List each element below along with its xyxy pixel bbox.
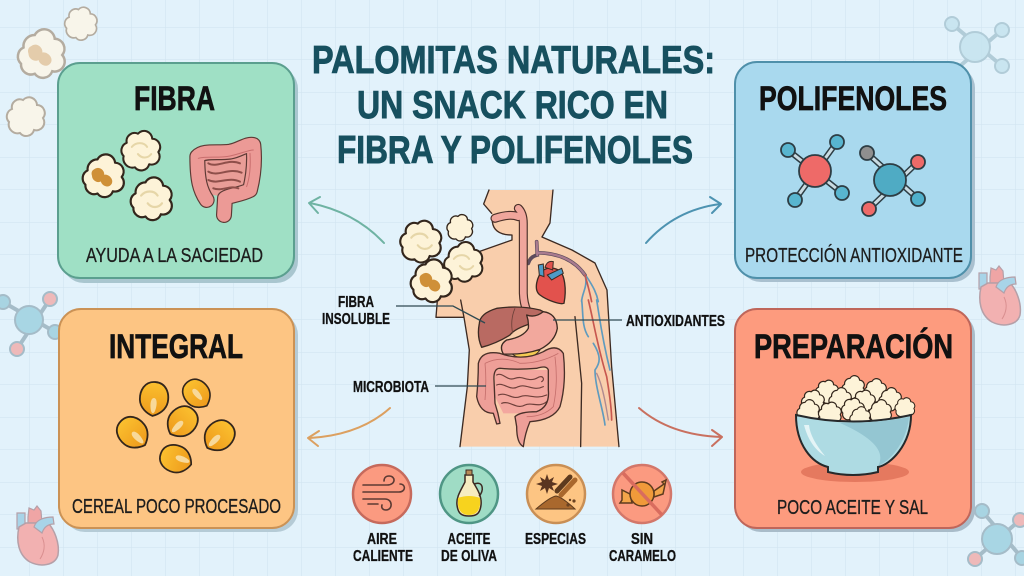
arrow: to fibra [309,197,384,243]
decoration: faint molecule left [0,292,62,356]
label: aire caliente: CALIENTE [353,548,413,565]
label: aire caliente: AIRE [367,531,397,548]
label: especias: ESPECIAS [525,531,586,548]
label: sin caramelo: SIN [631,531,653,548]
title: UN SNACK RICO EN [357,84,668,127]
panel: fibra [58,63,298,283]
heart [536,268,565,304]
decoration: faint heart left [17,506,58,565]
icon row [353,465,676,565]
arrow: to preparacion [639,408,722,446]
icon: especias [527,465,585,523]
label: aceite de oliva: DE OLIVA [441,548,497,565]
heading: fibra: FIBRA [134,80,215,118]
icon: sin caramelo [613,465,671,523]
panel: polifenoles [735,62,975,282]
popcorn near mouth [400,215,482,302]
label: sin caramelo: CARAMELO [609,548,676,565]
caption: preparacion: POCO ACEITE Y SAL [777,497,928,519]
decoration: faint molecule lower right [968,504,1024,566]
label: fibra insoluble: FIBRA [338,294,374,311]
label: fibra insoluble [322,294,485,328]
heading: polifenoles: POLIFENOLES [759,80,947,118]
icon: corn kernels [111,374,241,477]
arm vessels lower [582,300,612,425]
label: antioxidantes: ANTIOXIDANTES [626,313,725,330]
decoration: faint heart right [979,266,1020,325]
caption: fibra: AYUDA A LA SACIEDAD [86,245,263,267]
icon: molecule blue [860,146,925,216]
panel: preparacion [735,309,975,532]
decoration: faint popcorn top left [7,7,97,136]
stomach [501,312,557,354]
caption: polifenoles: PROTECCIÓN ANTIOXIDANTE [745,244,963,267]
abdominal organs [477,300,612,447]
label: aceite de oliva: ACEITE [448,531,491,548]
liver [478,307,543,347]
decoration: faint molecule top right [945,17,1009,73]
arrow: to integral [308,408,390,446]
colon [477,348,564,447]
icon: intestine [197,143,255,215]
panel: integral [59,309,298,532]
heading: integral: INTEGRAL [109,328,243,366]
icon: aceite de oliva [440,465,498,523]
icon: molecule red [781,135,849,207]
title: FIBRA Y POLIFENOLES [337,129,693,172]
esophagus [495,208,537,323]
heading: preparacion: PREPARACIÓN [754,328,953,366]
icon: aire caliente [353,465,411,523]
torso silhouette [436,190,619,447]
label: sin caramelo [609,531,676,565]
body diagram [322,190,725,447]
title: PALOMITAS NATURALES: [312,39,715,82]
pancreas [508,345,540,358]
label: aire caliente [353,531,413,565]
label: microbiota: MICROBIOTA [353,379,429,396]
upper arm vessels [528,242,598,302]
icon: popcorn kernels [83,131,172,220]
arrow: to polifenoles [646,197,721,243]
label: aceite de oliva [441,531,497,565]
title [312,39,715,172]
icon: popcorn bowl [796,376,915,482]
caption: integral: CEREAL POCO PROCESADO [72,496,281,518]
small intestine [495,370,548,413]
label: fibra insoluble: INSOLUBLE [322,311,390,328]
